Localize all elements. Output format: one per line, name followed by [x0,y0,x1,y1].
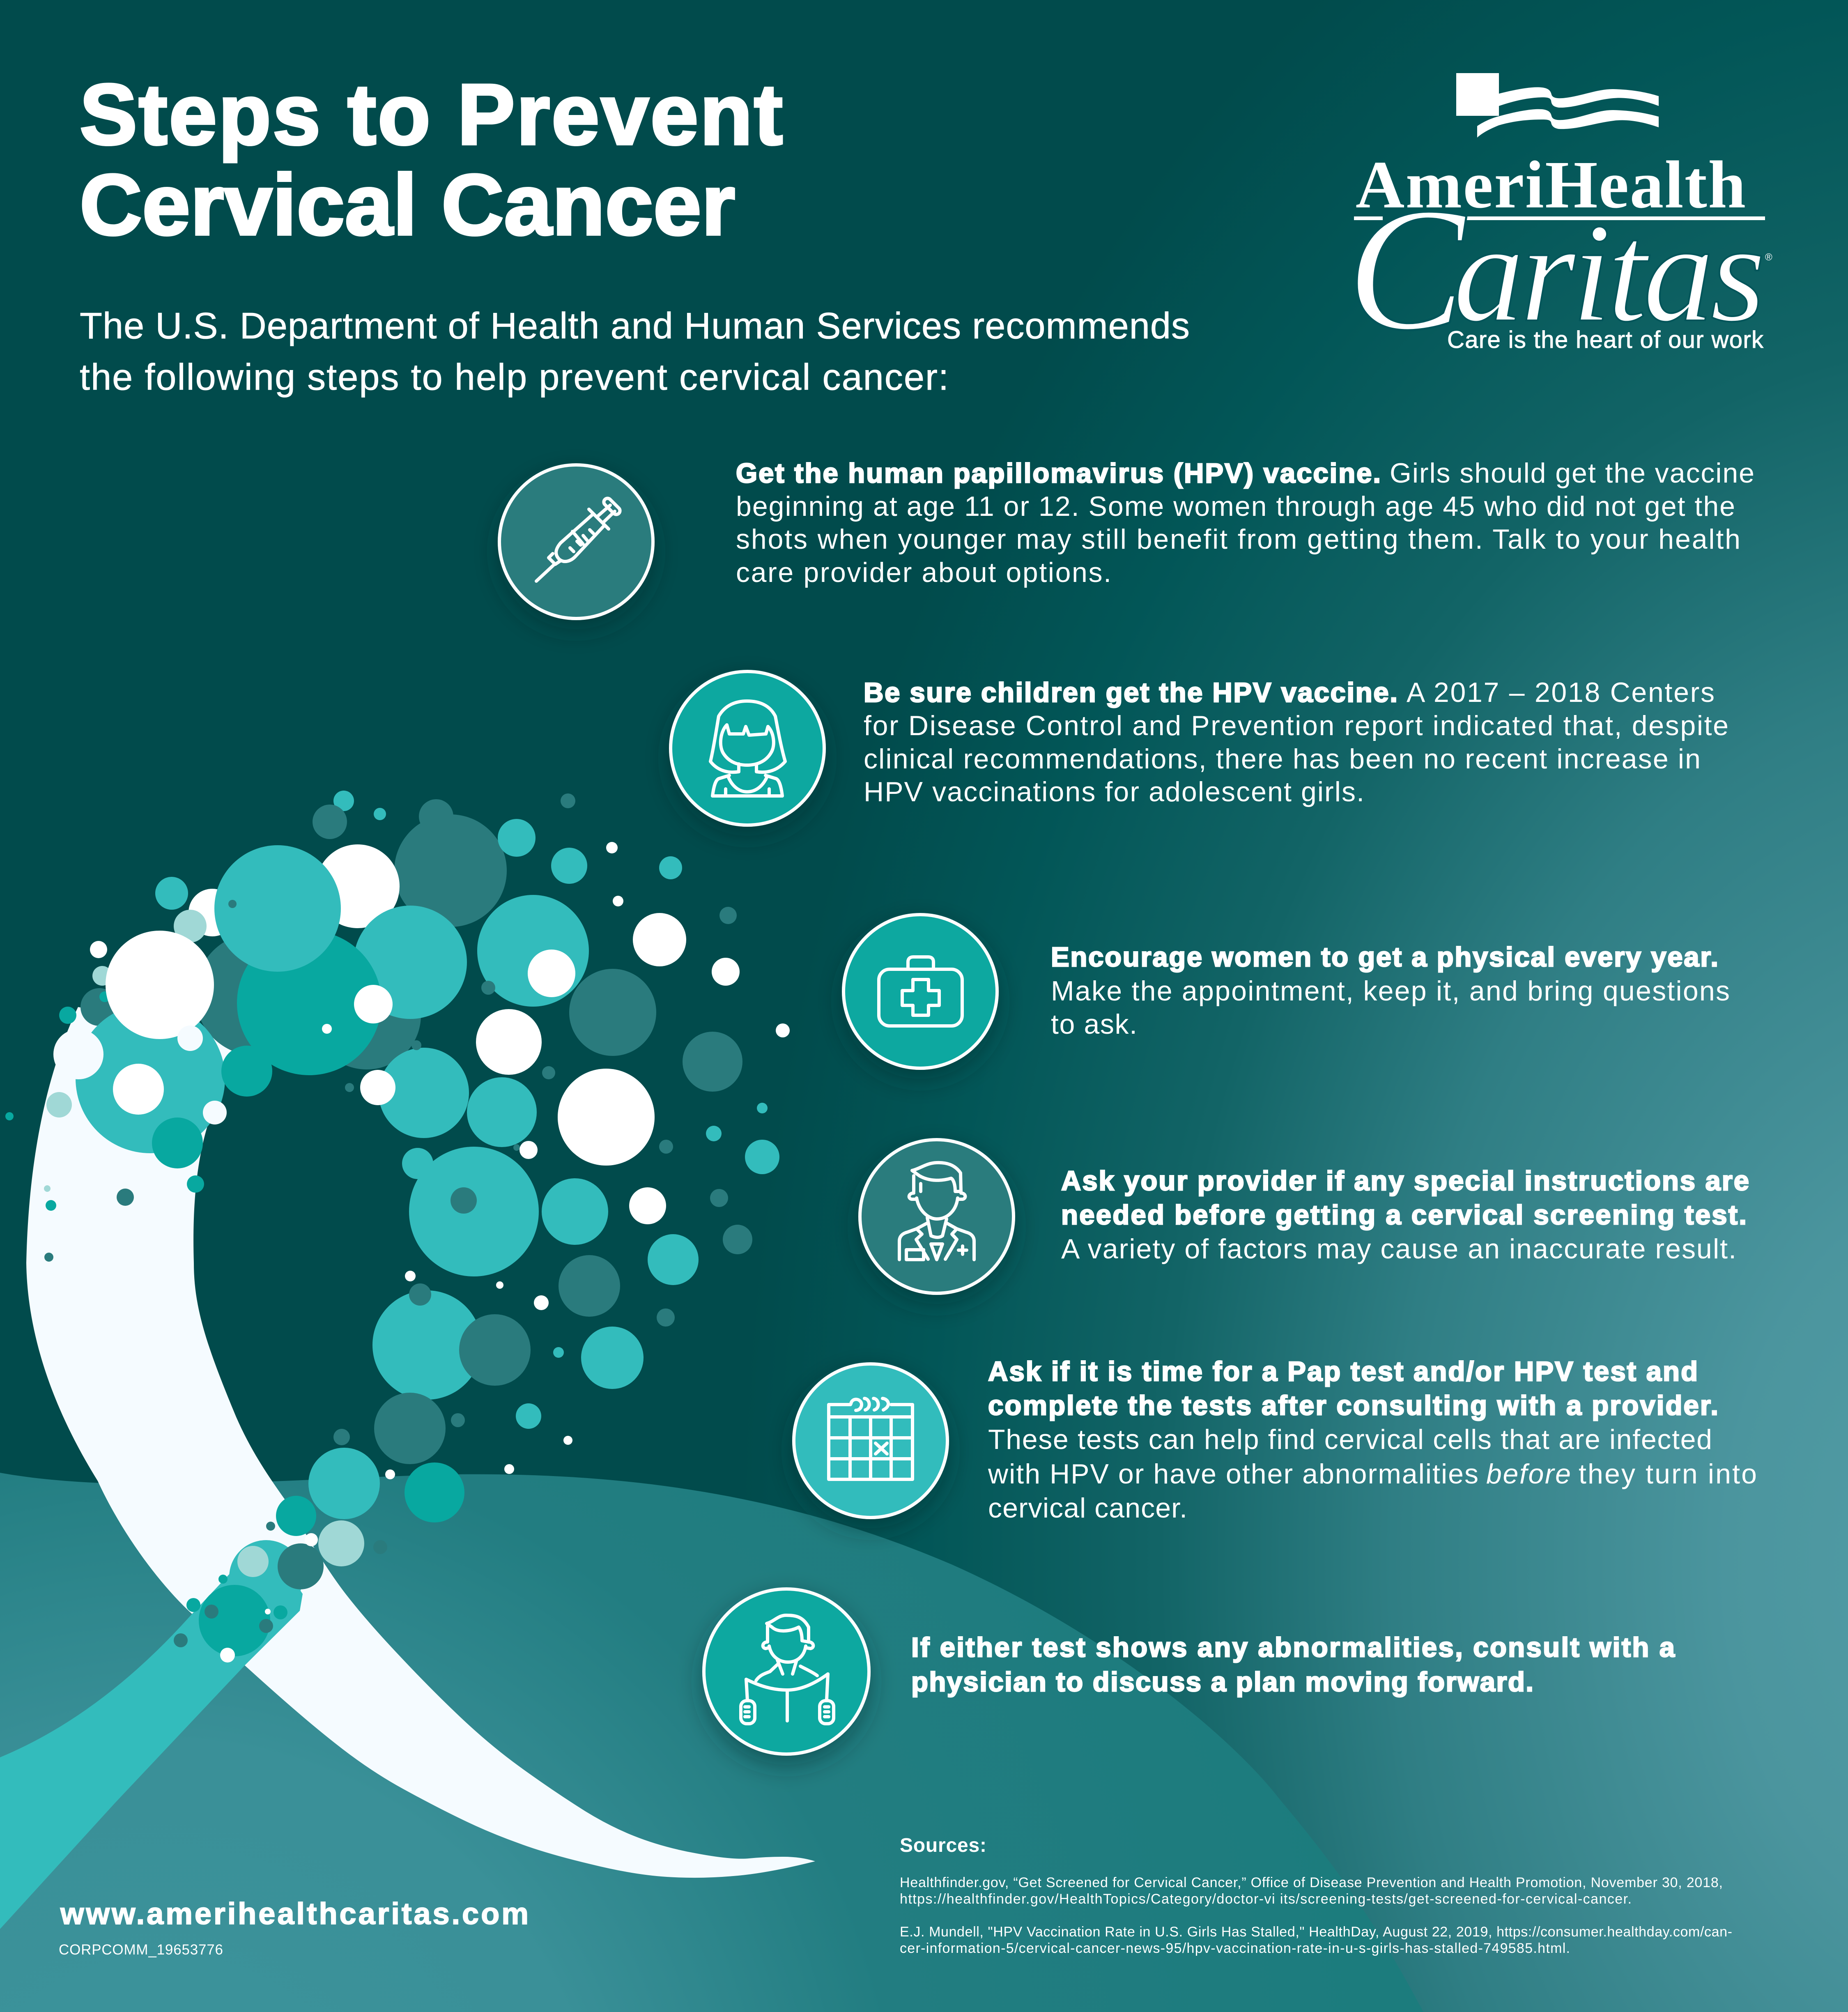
logo: AmeriHealth Caritas: C [1347,172,1469,367]
logo: AmeriHealth Caritas [1347,73,1772,367]
title: Steps to Prevent [80,66,783,163]
step 6 text: physician to discuss a plan moving forward. [911,1667,1533,1697]
logo flag [1456,73,1659,138]
sources: https://healthfinder.gov/HealthTopics/Category/doctor-vi its/screening-tests/get-screened-for-cervical-cancer. [900,1891,1632,1907]
step 5 text: with HPV or have other abnormalities [988,1458,1478,1490]
sources: E.J. Mundell, "HPV Vaccination Rate in U.S. Girls Has Stalled," HealthDay, August 22, 2019, https://consumer.healthday.com/can- [900,1924,1732,1940]
step 1: HPV vaccine [499,458,1754,619]
step 5 text: complete the tests after consulting with a provider. [988,1390,1718,1421]
step 4: screening instructions [860,1140,1749,1293]
step 3: annual physical [844,915,1730,1068]
step 5 text [988,1356,1757,1524]
step 1 text: beginning at age 11 or 12. Some women through age 45 who did not get the [736,491,1735,522]
step 2 text: clinical recommendations, there has been no recent increase in [864,743,1701,775]
intro text: the following steps to help prevent cervical cancer: [80,357,949,398]
icon: doctor [860,1140,1014,1293]
step 5 text: These tests can help find cervical cells that are infected [988,1424,1712,1455]
step 1 text: shots when younger may still benefit from getting them. Talk to your health [736,524,1740,555]
ribbon: teal band [0,1540,303,1929]
step 5 text: cervical cancer. [988,1492,1187,1524]
icon: girl [671,671,824,825]
step 4 text: needed before getting a cervical screening test. [1061,1200,1747,1230]
step 5 text: they turn into [1579,1458,1757,1490]
step 3 text: Encourage women to get a physical every year. [1051,942,1718,973]
step 3 text [1051,942,1730,1040]
title: Cervical Cancer [80,156,735,253]
sources: Sources: [900,1835,986,1856]
step 2 text: A 2017 – 2018 Centers [1407,677,1715,708]
step 3 text: to ask. [1051,1009,1137,1040]
step 5: Pap or HPV test [794,1356,1757,1524]
step 1 text: Girls should get the vaccine [1390,458,1754,489]
step 2 text: Be sure children get the HPV vaccine. [864,677,1397,708]
step 2: children vaccine [671,671,1728,825]
logo wordmark: AmeriHealth [1356,147,1746,222]
step 5 text: before [1486,1458,1571,1490]
icon: physician reading [704,1589,869,1754]
sources [900,1835,1732,1956]
campaign code: CORPCOMM_19653776 [59,1942,223,1958]
logo tagline: Care is the heart of our work [1447,327,1764,353]
logo: AmeriHealth Caritas: ® [1765,252,1772,263]
step 6 text [911,1632,1675,1697]
icon: calendar [794,1364,947,1518]
title [80,66,783,253]
sources: cer-information-5/cervical-cancer-news-95/hpv-vaccination-rate-in-u-s-girls-has-stalled-749585.html. [900,1941,1570,1956]
background hump [0,1473,1423,2012]
bubbles: upper ribbon cluster [5,791,507,1262]
step 2 text: HPV vaccinations for adolescent girls. [864,776,1364,807]
step 2 text [864,677,1728,807]
sources: Healthfinder.gov, “Get Screened for Cervical Cancer,” Office of Disease Prevention and Health Promotion, November 30, 2018, [900,1875,1723,1890]
bubbles: right cloud [345,793,790,1400]
step 4 text [1061,1166,1749,1265]
step 5 text: Ask if it is time for a Pap test and/or HPV test and [988,1356,1698,1387]
step 3 text: Make the appointment, keep it, and bring questions [1051,975,1730,1007]
step 1 text: care provider about options. [736,557,1111,588]
step 4 text: Ask your provider if any special instructions are [1061,1166,1749,1196]
step 6: consult physician [704,1589,1675,1754]
intro text [80,306,1190,398]
step 1 text [736,458,1754,588]
icon: first aid kit [844,915,997,1068]
intro text: The U.S. Department of Health and Human Services recommends [80,306,1190,347]
logo: AmeriHealth Caritas: aritas [1453,194,1765,351]
bubbles: lower ribbon cluster [174,1393,572,1662]
step 6 text: If either test shows any abnormalities, consult with a [911,1632,1675,1663]
step 1 text: Get the human papillomavirus (HPV) vaccine. [736,458,1381,489]
step 2 text: for Disease Control and Prevention report indicated that, despite [864,710,1728,741]
website url: www.amerihealthcaritas.com [60,1897,529,1931]
icon: syringe [499,465,653,619]
step 4 text: A variety of factors may cause an inaccurate result. [1061,1233,1736,1265]
ribbon: white band [26,1007,815,1878]
